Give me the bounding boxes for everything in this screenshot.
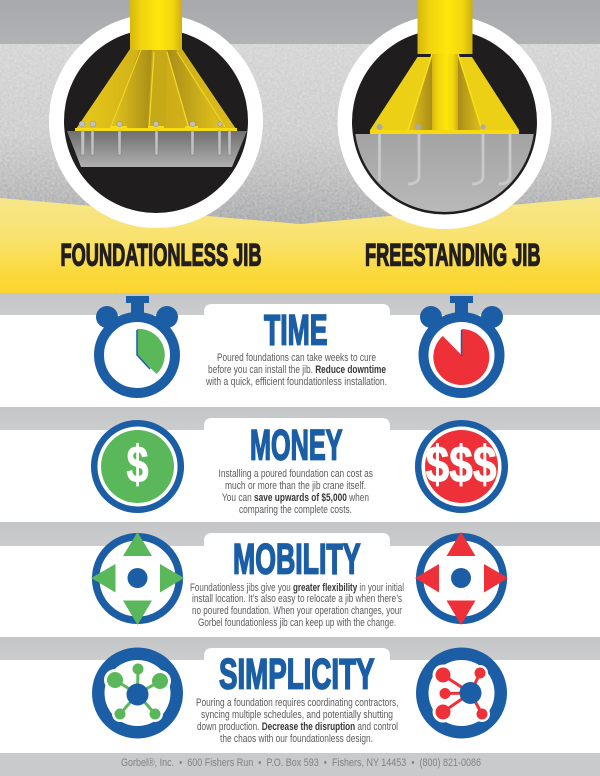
body text: Pouring a foundation requires coordinating contractors, — [196, 697, 398, 709]
body text — [196, 697, 398, 745]
body text: Poured foundations can take weeks to cure — [217, 352, 376, 364]
freestanding illustration — [338, 0, 552, 229]
base plate — [370, 130, 519, 134]
base plate — [75, 126, 237, 131]
black disc — [352, 30, 537, 214]
J bolts — [380, 134, 510, 184]
body text: the chaos with our foundationless design. — [220, 733, 373, 745]
body text: Foundationless jibs give you greater flexibility in your initial — [190, 582, 404, 594]
icon: red arrows — [415, 532, 508, 625]
body text: Gorbel foundationless jib can keep up with the change. — [198, 617, 396, 629]
body text — [218, 468, 373, 516]
icon: green network — [92, 648, 183, 738]
body text: syncing multiple schedules, and potentially shutting — [201, 709, 393, 721]
icon: green dollar: $ — [126, 436, 149, 494]
pole — [130, 0, 182, 50]
body text: no poured foundation. When your operation changes, your — [192, 605, 402, 617]
flared base — [370, 54, 519, 130]
anchor bolts — [79, 121, 231, 155]
body text: before you can install the jib. Reduce downtime — [208, 364, 386, 376]
icon: red dollars: $$$ — [426, 436, 497, 494]
body text: You can save upwards of $5,000 when — [222, 492, 369, 504]
bolt heads — [376, 124, 486, 130]
concrete slab — [67, 131, 247, 167]
heading: TIME — [264, 308, 328, 354]
white ring — [49, 14, 263, 228]
concrete backdrop — [0, 44, 600, 229]
icon: red stopwatch — [420, 296, 503, 393]
body text: with a quick, efficient foundationless installation. — [205, 376, 387, 388]
section: money — [94, 418, 505, 516]
body text: much or more than the jib crane itself. — [225, 480, 366, 492]
pole — [418, 0, 472, 54]
yellow label band — [0, 197, 600, 293]
white ring — [338, 15, 552, 229]
heading: MOBILITY — [233, 536, 360, 584]
body text — [205, 352, 387, 388]
label: foundationless jib: FOUNDATIONLESS JIB — [60, 236, 262, 272]
black disc — [64, 29, 248, 213]
white heading tab — [204, 304, 390, 318]
footer — [0, 753, 600, 776]
body text: down production. Decrease the disruption and control — [197, 721, 398, 733]
gray section bands — [0, 293, 600, 660]
heading: SIMPLICITY — [219, 652, 374, 698]
white heading tab — [204, 533, 390, 548]
icon: red network — [416, 648, 507, 738]
top gray band — [0, 0, 600, 44]
header panel — [0, 0, 600, 293]
section: time — [96, 296, 503, 393]
contact line: Gorbel®, Inc. • 600 Fishers Run • P.O. Box 593 • Fishers, NY 14453 • (800) 821-0086 — [121, 757, 481, 769]
foundationless illustration — [49, 0, 263, 228]
body text — [190, 582, 404, 629]
flared base — [76, 49, 236, 129]
white heading tab — [204, 648, 390, 662]
icon: red dollars — [418, 423, 505, 510]
icon: green stopwatch — [96, 296, 178, 393]
icon: green dollar — [94, 423, 181, 510]
heading: MONEY — [250, 422, 342, 470]
white heading tab — [204, 418, 390, 432]
section: simplicity — [92, 648, 507, 745]
body text: Installing a poured foundation can cost as — [218, 468, 373, 480]
concrete block — [355, 134, 534, 212]
body text: install location. It’s also easy to relocate a jib when there’s — [192, 593, 402, 605]
icon: green arrows — [91, 532, 184, 625]
section: mobility — [91, 532, 508, 629]
body text: comparing the complete costs. — [239, 504, 352, 516]
